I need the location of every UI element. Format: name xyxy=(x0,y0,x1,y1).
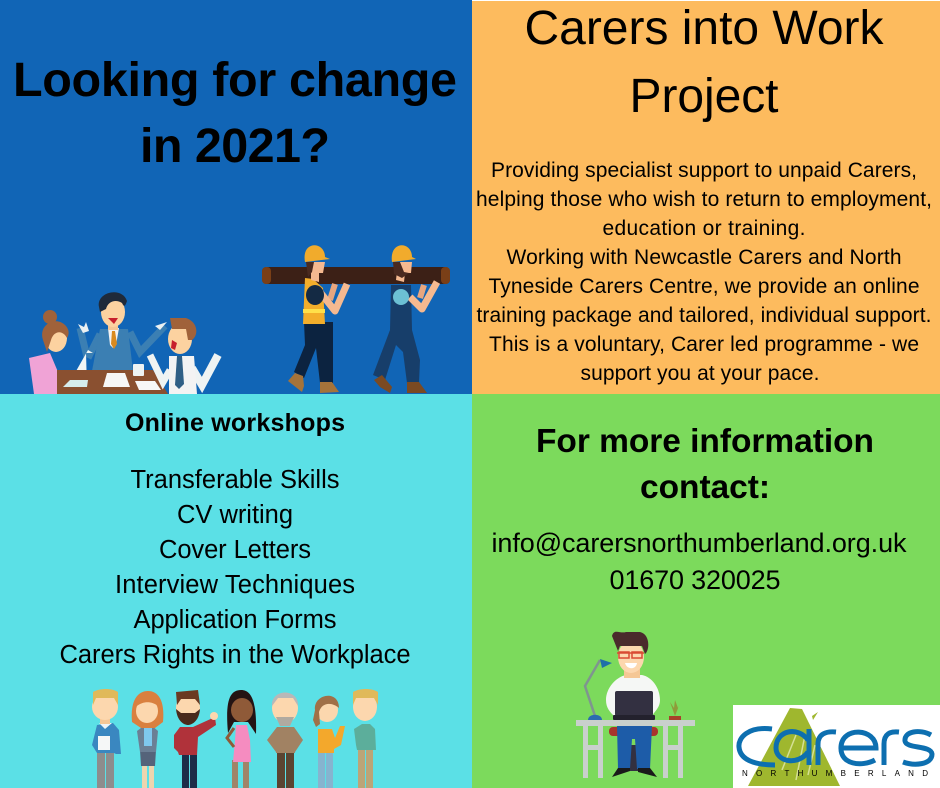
text: phone: 01670 320025 xyxy=(610,565,780,595)
list: workshop topics: Transferable Skills xyxy=(130,466,340,494)
heading: project: Project xyxy=(630,70,778,123)
text block: project description: Providing specialist support to unpaid Carers, xyxy=(491,159,917,182)
heading: in 2021: in 2021? xyxy=(140,119,330,173)
person 4 xyxy=(227,690,256,788)
logo: carers northumberland xyxy=(733,705,940,788)
list: workshop topics: Application Forms xyxy=(134,606,336,634)
heading: online workshops: Online workshops xyxy=(125,409,345,437)
text: email: info@carersnorthumberland.org.uk xyxy=(492,528,907,558)
text block: project description: Tyneside Carers Centre, we provide an online xyxy=(488,275,920,298)
panel: cyan online workshops xyxy=(0,394,472,788)
person 7 xyxy=(353,689,378,788)
list: workshop topics xyxy=(60,466,410,669)
list: workshop topics: CV writing xyxy=(177,501,293,529)
person 1 xyxy=(92,689,121,788)
illustration: office meeting xyxy=(29,292,218,394)
text block: project description: support you at your pace. xyxy=(580,362,820,385)
text block: project description: This is a voluntary, Carer led programme - we xyxy=(489,333,919,356)
heading: contact: contact: xyxy=(640,469,770,506)
panel: green contact xyxy=(472,394,940,788)
text block: project description xyxy=(476,159,932,385)
logo text: NORTHUMBERLAND xyxy=(742,769,928,778)
list: workshop topics: Carers Rights in the Workplace xyxy=(60,641,410,669)
heading: looking for change: Looking for change xyxy=(13,53,457,107)
illustration: workers carrying log xyxy=(262,245,450,393)
text block: project description: Working with Newcastle Carers and North xyxy=(506,246,902,269)
panel: blue headline xyxy=(0,0,472,394)
illustration: group of people xyxy=(92,689,378,788)
heading: for more information: For more information xyxy=(536,423,874,460)
list: workshop topics: Cover Letters xyxy=(159,536,311,564)
person 5 xyxy=(267,692,303,788)
text block: project description: training package and tailored, individual support. xyxy=(476,304,932,327)
person 3 xyxy=(174,690,218,788)
panel: orange project description xyxy=(472,1,940,394)
text block: project description: helping those who wish to return to employment, xyxy=(476,188,932,211)
person 6 xyxy=(313,696,345,788)
illustration: man at desk xyxy=(576,632,695,778)
person 2 xyxy=(132,691,163,788)
heading: carers into work: Carers into Work xyxy=(524,2,884,55)
text block: project description: education or training. xyxy=(602,217,806,240)
list: workshop topics: Interview Techniques xyxy=(115,571,355,599)
